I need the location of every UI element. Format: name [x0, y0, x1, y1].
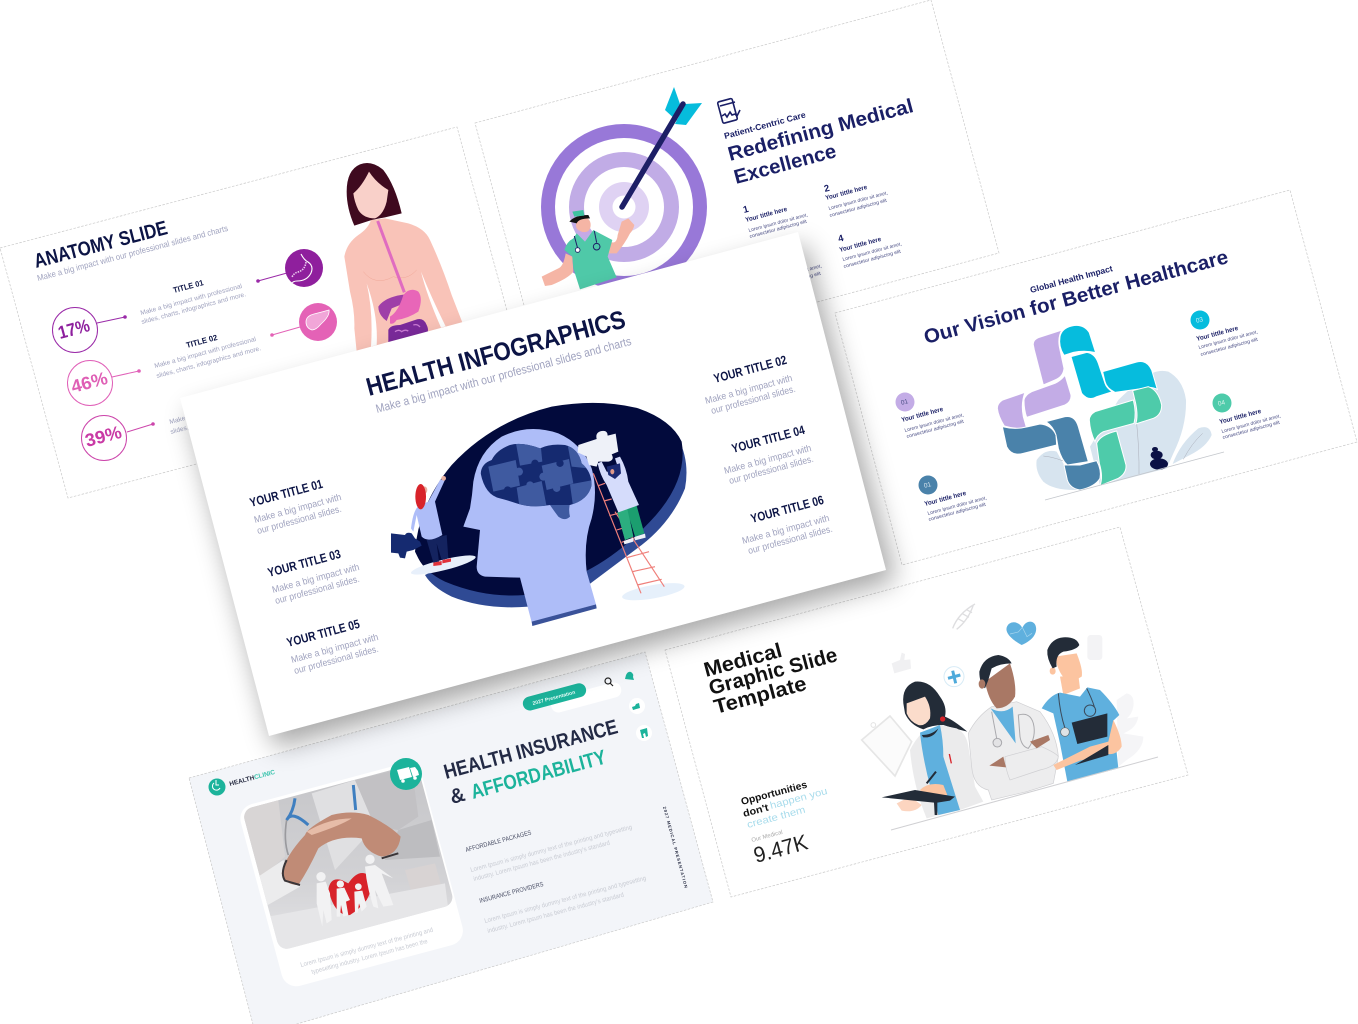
text block: your title 06	[741, 493, 834, 557]
target rings	[541, 124, 707, 290]
illustration: person on ladder	[598, 457, 646, 544]
item 2: consectetur adipiscing elit	[829, 198, 888, 219]
panel: health infographics slide	[180, 232, 886, 736]
top bar with search	[549, 678, 623, 714]
quote: don't	[742, 802, 771, 820]
illustration: disc behind head	[415, 403, 686, 607]
illustration: floor ellipses	[410, 552, 686, 604]
text block: partially hidden third item: Make a big impact with professional	[169, 392, 272, 426]
point 01 purple: Lorem ipsum dolor sit amet,	[904, 412, 964, 434]
icon: stomach	[256, 249, 323, 287]
ground line	[1045, 452, 1224, 500]
icon: side button one	[629, 698, 645, 714]
text block: your title 01: Make a big impact with	[253, 492, 343, 526]
text block: your title 02: our professional slides.	[710, 384, 797, 417]
item 2: Your tittle here	[825, 184, 868, 202]
illustration: head profile	[463, 429, 597, 626]
target heading: Excellence	[732, 140, 839, 189]
item 4: Your tittle here	[839, 236, 882, 254]
illustration: woman with puzzle	[391, 476, 451, 566]
text block: your title 01: our professional slides.	[256, 504, 343, 537]
vision heading: Our Vision for Better Healthcare	[922, 246, 1231, 349]
medical heading	[701, 639, 840, 719]
vertical label: 2027 MEDICAL PRESENTATION	[662, 806, 689, 888]
text block: title 01: slides, charts, infographics and more.	[141, 291, 247, 326]
panel: vision slide	[835, 190, 1357, 565]
icon: bell	[625, 672, 634, 680]
item 2	[823, 183, 888, 219]
point 03: 03	[1195, 316, 1204, 325]
clinic logo	[208, 769, 276, 796]
anatomy subtitle: Make a big impact with our professional slides and charts	[36, 223, 229, 283]
text block: your title 02: YOUR TITLE 02	[712, 353, 788, 386]
text block: your title 06: Make a big impact with	[741, 513, 831, 547]
ground line	[891, 757, 1158, 830]
quote: Opportunities	[740, 780, 809, 808]
text block: your title 04	[723, 423, 815, 487]
block: affordable packages: AFFORDABLE PACKAGES	[465, 829, 533, 854]
item 2: 2	[823, 183, 831, 195]
faint decor: dna, thumb, bottle, clipboard, leaves	[862, 604, 1143, 776]
text block: your title 03: Make a big impact with	[271, 562, 361, 596]
block: affordable packages: industry. Lorem Ipsum has been the industry's standard	[473, 840, 611, 883]
stat label: Our Medical	[751, 830, 783, 844]
badge: ambulance	[390, 758, 422, 790]
stat: 39%: 39%	[83, 422, 124, 451]
panel: anatomy slide	[0, 127, 525, 498]
point 01 steel: Lorem ipsum dolor sit amet,	[927, 495, 987, 517]
white card	[237, 760, 466, 990]
point 01 purple: 01	[900, 398, 909, 407]
icon: plus	[944, 667, 964, 687]
insurance heading: HEALTH INSURANCE	[441, 715, 620, 784]
card caption: Lorem Ipsum is simply dummy text of the printing and	[300, 927, 434, 969]
point 01 purple	[896, 392, 965, 440]
text block: your title 01: YOUR TITLE 01	[248, 477, 324, 510]
point 03	[1190, 310, 1259, 358]
quote: create them	[746, 805, 807, 831]
text block: your title 04: Make a big impact with	[723, 443, 813, 477]
item 4: consectetur adipiscing elit	[843, 249, 902, 270]
icon: medical tablet	[717, 98, 740, 123]
insurance heading: &	[447, 783, 468, 809]
illustration: puzzle brain	[480, 444, 592, 520]
item 4: 4	[837, 233, 846, 245]
item 4	[837, 233, 902, 270]
main slide shadow	[188, 244, 896, 748]
block: insurance providers: Lorem Ipsum is simply dummy text of the printing and typesetting	[484, 875, 647, 925]
panel: insurance slide	[189, 652, 713, 1024]
item 1: 1	[742, 204, 751, 216]
point 01 purple: consectetur adipiscing elit	[906, 419, 965, 440]
point 04	[1212, 394, 1281, 441]
point 03: Your tittle here	[1196, 325, 1239, 343]
text block: title 02: Make a big impact with professional	[154, 336, 257, 370]
text block: your title 05: our professional slides.	[293, 644, 380, 677]
target eyebrow: Patient-Centric Care	[723, 109, 807, 141]
quote	[740, 780, 829, 831]
point 01 purple: Your tittle here	[901, 406, 944, 424]
medical heading: Medical	[701, 639, 785, 682]
stat: 46%: 46%	[69, 368, 110, 397]
insurance heading: AFFORDABILITY	[468, 746, 609, 804]
item 3: consectetur adipiscing elit	[763, 271, 822, 292]
point 01 steel: 01	[923, 481, 932, 490]
icon: heart	[1006, 622, 1036, 645]
text block: your title 01	[248, 477, 343, 537]
text block: your title 05	[285, 617, 380, 677]
item 1: Lorem ipsum dolor sit amet,	[748, 212, 808, 234]
pebbles	[1150, 447, 1168, 470]
figure: anatomy body	[344, 163, 463, 352]
icon: side button two	[636, 725, 652, 741]
doctor: man with crossed arms	[968, 655, 1058, 800]
point 03: consectetur adipiscing elit	[1200, 337, 1259, 358]
text block: title 02: slides, charts, infographics and more.	[156, 345, 262, 380]
photo: hands protecting paper family	[244, 770, 452, 949]
clinic logo: HEALTHCLINIC	[229, 769, 276, 788]
vision eyebrow: Global Health Impact	[1029, 263, 1114, 295]
main subtitle: Make a big impact with our professional slides and charts	[374, 334, 633, 416]
arrow in target	[622, 87, 702, 207]
background foliage	[1036, 371, 1212, 490]
stat: 17%	[52, 308, 127, 352]
point 01 steel: Your tittle here	[924, 490, 967, 508]
text block: your title 04: our professional slides.	[728, 454, 815, 487]
icon: liver	[270, 303, 337, 341]
text block: your title 04: YOUR TITLE 04	[730, 423, 806, 456]
point 04: 04	[1217, 399, 1226, 408]
text block: title 02: TITLE 02	[185, 333, 219, 350]
text block: your title 02	[704, 353, 797, 417]
block: insurance providers: INSURANCE PROVIDERS	[479, 881, 545, 905]
main heading: HEALTH INFOGRAPHICS	[363, 306, 628, 402]
block: insurance providers: industry. Lorem Ipsum has been the industry's standard	[487, 892, 625, 935]
stat: 17%: 17%	[56, 315, 92, 343]
pill label	[521, 682, 588, 712]
stat value: 9.47K	[751, 829, 811, 868]
point 04: Lorem ipsum dolor sit amet,	[1221, 413, 1281, 435]
medical heading: Graphic Slide	[706, 643, 840, 700]
item 1: consectetur adipiscing elit	[749, 219, 808, 240]
point 04: consectetur adipiscing elit	[1222, 420, 1281, 441]
stat: 46%	[68, 360, 141, 406]
card caption: typesetting industry. Lorem Ipsum has been the	[311, 938, 429, 976]
text block: your title 05: Make a big impact with	[290, 632, 380, 666]
anatomy heading: ANATOMY SLIDE	[32, 217, 170, 273]
text block: your title 03	[266, 547, 361, 607]
pill label: 2027 Presentation	[532, 690, 576, 707]
target heading	[726, 95, 916, 189]
text block: title 01: TITLE 01	[172, 278, 205, 295]
text block: your title 03: YOUR TITLE 03	[266, 547, 342, 580]
doctor: man in scrubs	[1042, 637, 1122, 782]
panel: medical graphic slide	[665, 527, 1188, 897]
insurance heading	[441, 715, 620, 809]
nurse illustration	[542, 210, 634, 289]
medical heading: Template	[711, 672, 809, 719]
text block: your title 06: our professional slides.	[747, 524, 834, 557]
text block: partially hidden third item: slides, charts, infographics and more.	[170, 401, 276, 436]
point 01 steel	[918, 476, 987, 523]
medical cross illustration	[997, 325, 1162, 490]
quote: happen you	[769, 786, 829, 812]
block: affordable packages: Lorem Ipsum is simply dummy text of the printing and typesetting	[470, 824, 633, 874]
text block: your title 06: YOUR TITLE 06	[749, 493, 825, 526]
point 03: Lorem ipsum dolor sit amet,	[1198, 329, 1258, 351]
item 1	[742, 204, 808, 240]
point 04: Your tittle here	[1219, 408, 1262, 426]
doctor: woman	[882, 682, 983, 818]
item 4: Lorem ipsum dolor sit amet,	[842, 241, 902, 263]
panel: target slide	[475, 0, 999, 376]
target heading: Redefining Medical	[726, 95, 916, 166]
item 3: Lorem ipsum dolor sit amet,	[762, 263, 822, 285]
point 01 steel: consectetur adipiscing elit	[928, 502, 987, 523]
illustration: white puzzle piece	[578, 431, 618, 467]
text block: your title 05: YOUR TITLE 05	[285, 617, 361, 650]
item 1: Your tittle here	[745, 206, 788, 224]
item 2: Lorem ipsum dolor sit amet,	[828, 190, 888, 212]
text block: your title 02: Make a big impact with	[704, 373, 794, 407]
illustration: ladder	[593, 473, 664, 593]
text block: your title 03: our professional slides.	[274, 574, 361, 607]
text block: title 01: Make a big impact with professional	[140, 283, 243, 317]
stat: 39%	[82, 416, 155, 460]
